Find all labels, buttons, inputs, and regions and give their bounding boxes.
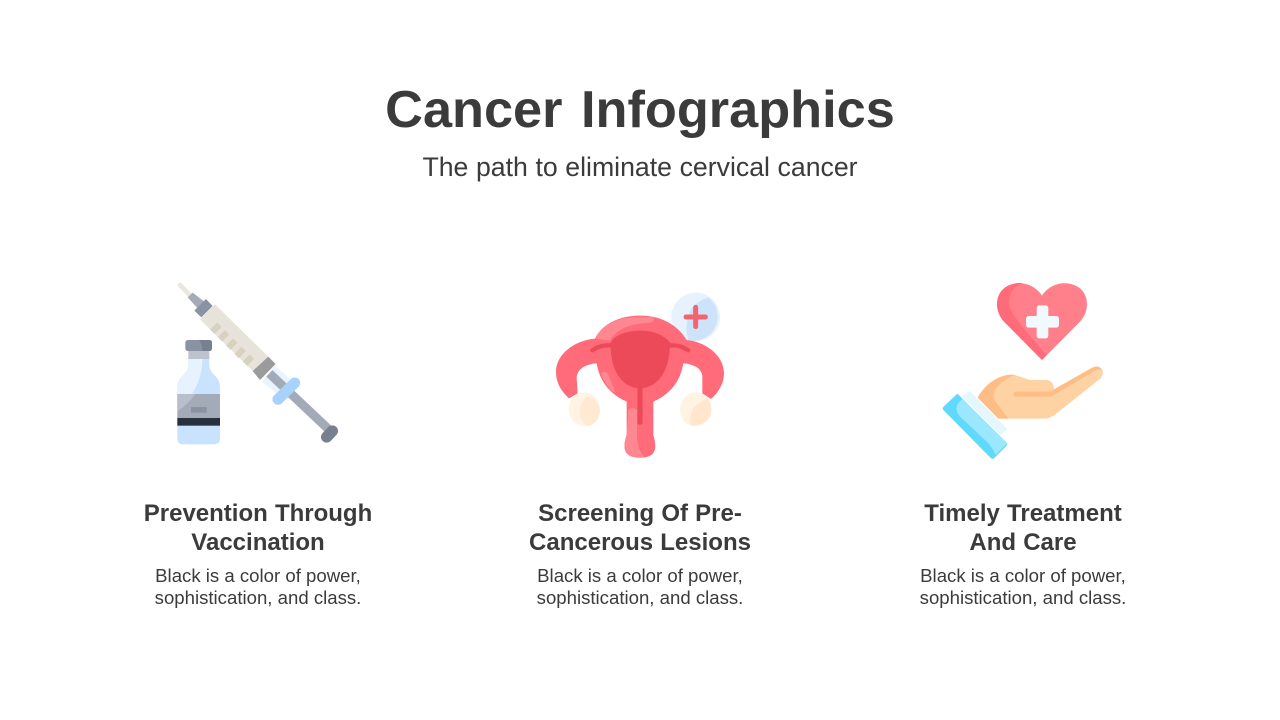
hand — [978, 367, 1103, 419]
syringe — [180, 285, 332, 437]
title: Cancer Infographics — [385, 81, 895, 139]
heading: prevention: Vaccination — [191, 529, 325, 556]
heading: prevention: Prevention Through — [144, 500, 372, 527]
heading: treatment: And Care — [969, 529, 1077, 556]
description: prevention — [155, 565, 361, 608]
heading: screening: Screening Of Pre- — [538, 500, 742, 527]
description: screening — [537, 565, 743, 608]
uterus body — [556, 316, 724, 458]
heading: screening: Cancerous Lesions — [529, 529, 751, 556]
description: treatment: Black is a color of power, — [920, 565, 1126, 586]
description: screening: Black is a color of power, — [537, 565, 743, 586]
description: prevention: Black is a color of power, — [155, 565, 361, 586]
icon: hand holding heart — [942, 282, 1103, 459]
sleeve cuff — [943, 391, 1007, 459]
icon: syringe and vaccine vial — [177, 282, 338, 444]
ovaries — [566, 390, 714, 429]
description: treatment — [920, 565, 1126, 608]
heading: treatment: Timely Treatment — [924, 500, 1122, 527]
description: prevention: sophistication, and class. — [155, 587, 361, 608]
vial — [177, 340, 220, 444]
heart with cross — [997, 283, 1087, 360]
heading: treatment — [924, 500, 1122, 556]
subtitle: The path to eliminate cervical cancer — [422, 152, 858, 182]
description: treatment: sophistication, and class. — [920, 587, 1126, 608]
medical badge — [671, 293, 720, 341]
heading: prevention — [144, 500, 372, 556]
heading: screening — [529, 500, 751, 556]
icon: uterus with medical badge — [556, 292, 724, 458]
description: screening: sophistication, and class. — [537, 587, 743, 608]
